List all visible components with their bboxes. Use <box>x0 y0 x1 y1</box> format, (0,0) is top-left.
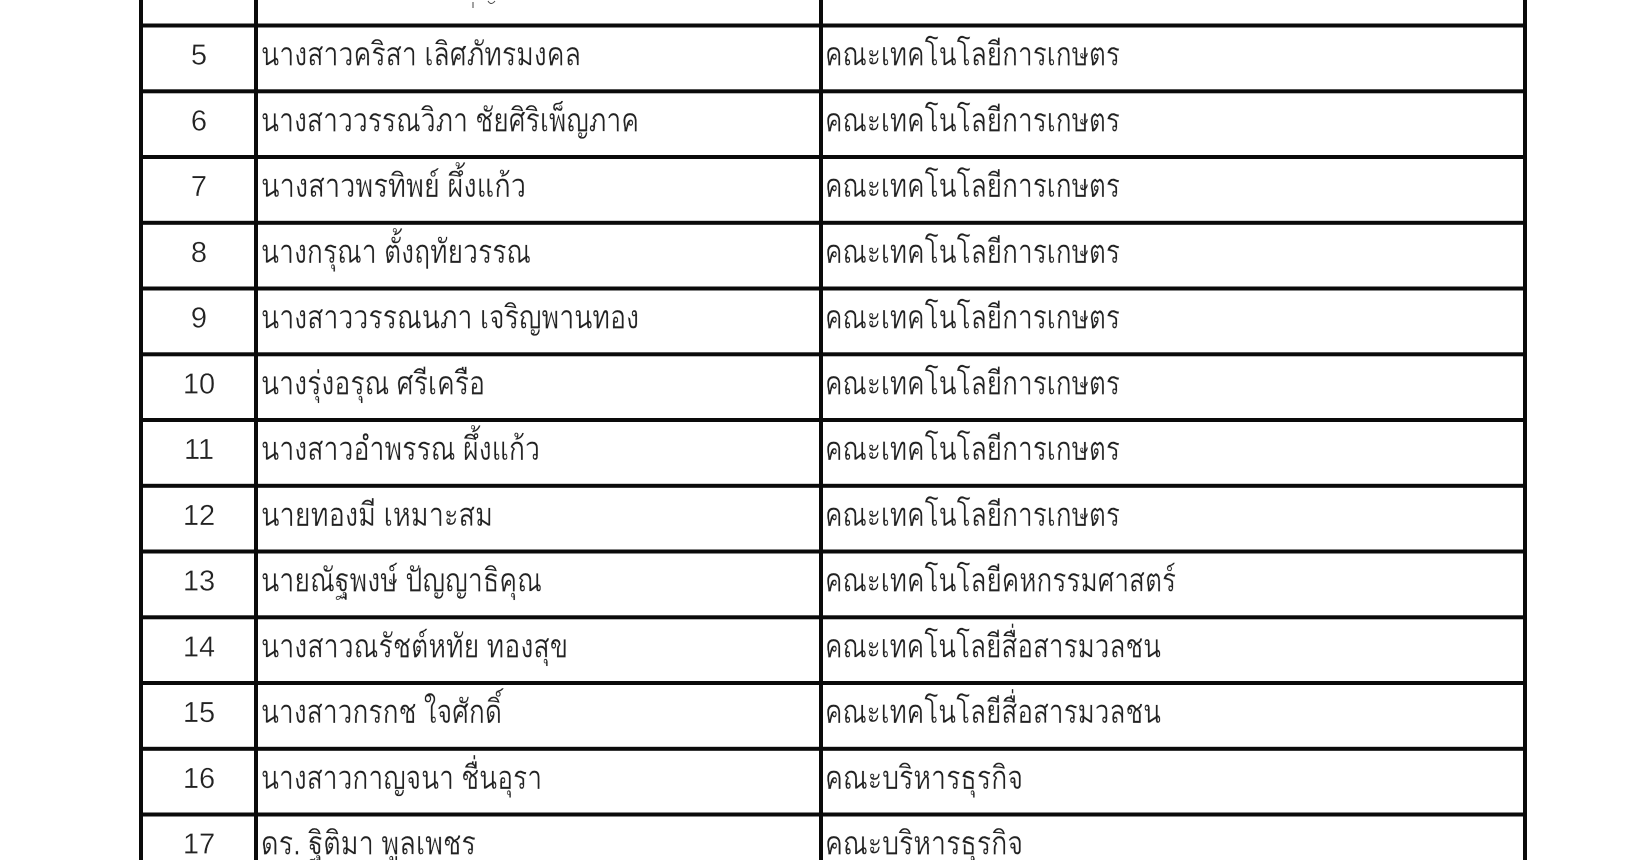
row 9: คณะเทคโนโลยีการเกษตร <box>825 298 1120 336</box>
row 8: คณะเทคโนโลยีการเกษตร <box>825 233 1120 270</box>
row 12: 12 <box>183 500 215 532</box>
row 10: คณะเทคโนโลยีการเกษตร <box>825 364 1120 401</box>
row 13: 13 <box>183 566 215 598</box>
row 9 <box>191 298 1120 336</box>
row 14: 14 <box>183 631 215 663</box>
row 15: คณะเทคโนโลยีสื่อสารมวลชน <box>825 689 1161 730</box>
row 11: คณะเทคโนโลยีการเกษตร <box>825 430 1120 467</box>
row 9: นางสาววรรณนภา เจริญพานทอง <box>261 298 639 336</box>
row 13 <box>183 562 1176 600</box>
row 7: คณะเทคโนโลยีการเกษตร <box>825 167 1120 204</box>
row 8: 8 <box>191 237 207 269</box>
row 6 <box>191 100 1120 138</box>
row 7: นางสาวพรทิพย์ ผึ้งแก้ว <box>261 162 526 204</box>
row 5: 5 <box>191 40 207 72</box>
row 10: นางรุ่งอรุณ ศรีเครือ <box>261 364 485 403</box>
row 14: คณะเทคโนโลยีสื่อสารมวลชน <box>825 623 1161 664</box>
row 16: 16 <box>183 763 215 795</box>
row 6: นางสาววรรณวิภา ชัยศิริเพ็ญภาค <box>261 100 639 138</box>
row 12 <box>183 496 1120 533</box>
row 7 <box>191 162 1120 204</box>
row 11: 11 <box>184 434 214 466</box>
row 5: คณะเทคโนโลยีการเกษตร <box>825 36 1120 72</box>
row 14 <box>183 623 1161 666</box>
row 11: นางสาวอำพรรณ ผึ้งแก้ว <box>261 425 540 467</box>
row 10 <box>183 364 1120 403</box>
row 8 <box>191 228 1120 272</box>
row 13: นายณัฐพงษ์ ปัญญาธิคุณ <box>261 562 542 600</box>
row 9: 9 <box>191 302 207 334</box>
row 17 <box>183 824 1023 860</box>
row 10: 10 <box>183 368 215 400</box>
row 4: cropped text remnants <box>473 1 495 8</box>
row 6: 6 <box>191 105 207 137</box>
row 16 <box>183 755 1023 798</box>
row 8: นางกรุณา ตั้งฤทัยวรรณ <box>261 228 531 272</box>
row 16: คณะบริหารธุรกิจ <box>825 759 1023 798</box>
row 11 <box>184 425 1120 467</box>
row 5: นางสาวคริสา เลิศภัทรมงคล <box>261 36 581 72</box>
row 15 <box>183 688 1161 730</box>
row 16: นางสาวกาญจนา ชื่นอุรา <box>261 755 542 798</box>
row 17: 17 <box>183 828 215 860</box>
row 15: 15 <box>183 697 215 729</box>
row 12: นายทองมี เหมาะสม <box>261 496 493 533</box>
row 15: นางสาวกรกช ใจศักดิ์ <box>261 688 504 730</box>
row 5 <box>191 36 1120 72</box>
row 6: คณะเทคโนโลยีการเกษตร <box>825 101 1120 138</box>
row 12: คณะเทคโนโลยีการเกษตร <box>825 496 1120 533</box>
row 7: 7 <box>191 171 207 203</box>
row 13: คณะเทคโนโลยีคหกรรมศาสตร์ <box>825 562 1176 598</box>
row 14: นางสาวณรัชต์หทัย ทองสุข <box>261 627 568 666</box>
